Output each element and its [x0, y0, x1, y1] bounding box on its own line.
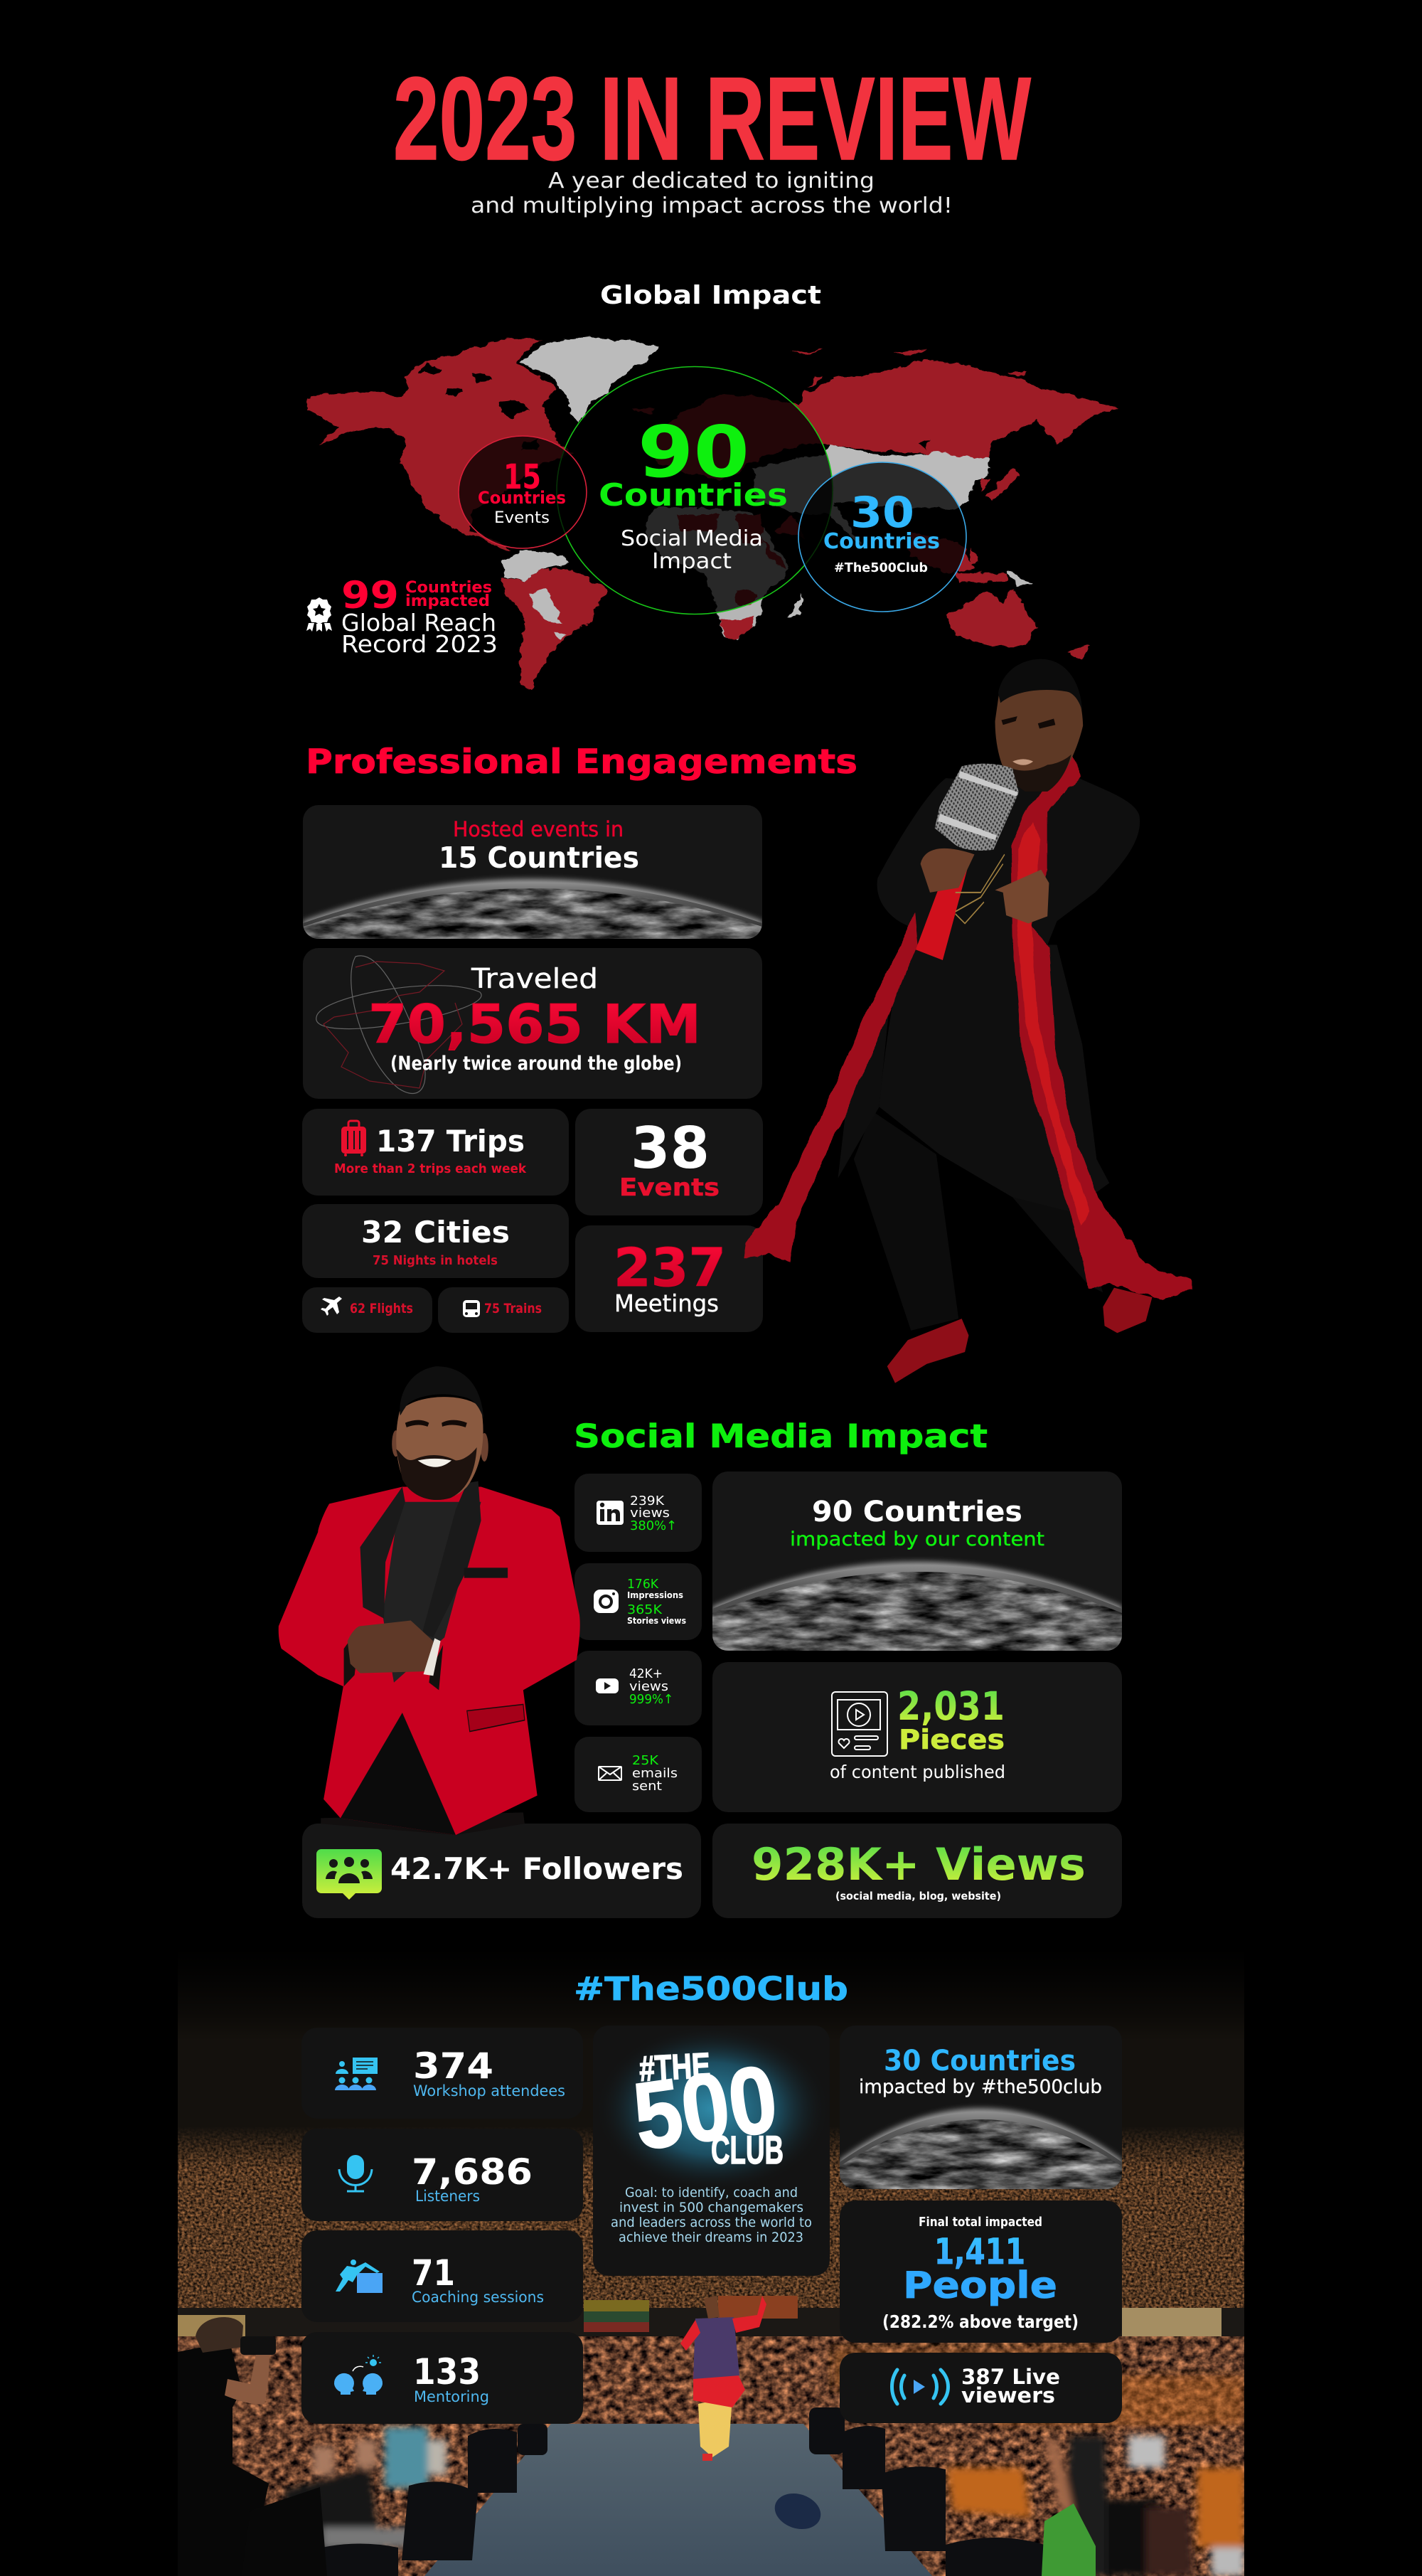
- panel: 32 cities: 32 Cities: [361, 1215, 510, 1250]
- panel: 237 meetings: Meetings: [614, 1289, 719, 1317]
- panel: hosted events in 15 countries: Hosted events in: [453, 817, 624, 841]
- panel: linkedin: 380%↑: [630, 1518, 677, 1533]
- circle: 15 countries events: Countries: [478, 488, 566, 508]
- icon: workshop: [335, 2058, 378, 2090]
- panel: 62 flights: [302, 1287, 432, 1333]
- panel: 75 trains: [438, 1287, 569, 1333]
- earth image: [712, 1562, 1122, 1651]
- heading: the500club: #The500Club: [574, 1970, 848, 2008]
- subtitle: [471, 169, 953, 218]
- icon: microphone: [339, 2155, 372, 2191]
- icon: followers bubble: [316, 1849, 382, 1900]
- panel: 374 workshop attendees: 374: [413, 2045, 493, 2087]
- circle: 15 countries events: [459, 436, 587, 548]
- icon: live stream: [892, 2370, 948, 2404]
- panel: 133 mentoring: [301, 2332, 583, 2424]
- global reach record: impacted: [405, 592, 490, 610]
- global reach record: Global Reach: [341, 609, 496, 637]
- panel: 387 live viewers: viewers: [961, 2383, 1055, 2407]
- earth image: [840, 2108, 1122, 2189]
- global reach record: Record 2023: [341, 630, 498, 658]
- panel: the500club background photo: [178, 1949, 1244, 2576]
- panel: 75 trains: 75 Trains: [484, 1301, 542, 1316]
- panel: email: sent: [632, 1779, 662, 1794]
- title: 2023 IN REVIEW: [393, 53, 1031, 185]
- figure: smiling man in red blazer: [279, 1366, 580, 1835]
- icon: luggage: [341, 1121, 366, 1156]
- panel: 374 workshop attendees: Workshop attendees: [413, 2082, 565, 2099]
- circle: 15 countries events: Events: [494, 509, 550, 527]
- panel: 42.7k followers: 42.7K+ Followers: [390, 1851, 683, 1886]
- circle: 30 countries the500club: 30: [850, 488, 914, 538]
- panel: 374 workshop attendees: [301, 2028, 583, 2119]
- panel: 1,411 people: People: [903, 2264, 1057, 2307]
- icon: youtube: [596, 1678, 619, 1693]
- panel: 2,031 pieces: Pieces: [899, 1724, 1005, 1755]
- upper stands crowd: [178, 2127, 1244, 2319]
- logo: 500: [627, 2045, 784, 2171]
- panel: 137 trips: [302, 1109, 569, 1196]
- global reach record: 99: [341, 574, 399, 617]
- panel: 237 meetings: 237: [614, 1238, 726, 1299]
- icon: envelope: [599, 1767, 621, 1780]
- panel: 137 trips: 137 Trips: [376, 1124, 525, 1159]
- circle: 90 countries social media impact: [557, 367, 833, 614]
- panel: 2,031 pieces: [712, 1662, 1122, 1812]
- panel: 137 trips: More than 2 trips each week: [334, 1161, 527, 1176]
- panel: 32 cities: [302, 1204, 569, 1278]
- panel: 30 countries impacted by the500club: impacted by #the500club: [859, 2076, 1102, 2098]
- panel: instagram: [574, 1563, 702, 1640]
- panel: instagram: Stories views: [627, 1616, 686, 1626]
- panel: linkedin: [574, 1474, 702, 1552]
- global reach record: [306, 574, 498, 658]
- green shirt attendee: [1042, 2503, 1096, 2576]
- goal text: [611, 2185, 812, 2245]
- goal text: Goal: to identify, coach and: [625, 2185, 798, 2200]
- circle: 30 countries the500club: [798, 462, 966, 612]
- circle: 90 countries social media impact: Impact: [652, 549, 732, 574]
- circle: 15 countries events: 15: [503, 457, 541, 497]
- circle: 90 countries social media impact: Social Media: [621, 526, 763, 551]
- panel: email: 25K: [632, 1753, 659, 1768]
- circle: 30 countries the500club: #The500Club: [834, 560, 928, 575]
- panel: 928k views: (social media, blog, website): [835, 1890, 1001, 1902]
- goal text: achieve their dreams in 2023: [619, 2230, 803, 2245]
- panel: youtube: 999%↑: [629, 1692, 673, 1707]
- icon: linkedin: [597, 1501, 624, 1525]
- subtitle: A year dedicated to igniting: [548, 169, 875, 193]
- panel: 42.7k followers: [302, 1824, 701, 1918]
- panel: 1,411 people: (282.2% above target): [882, 2311, 1079, 2332]
- panel: 387 live viewers: [840, 2353, 1122, 2423]
- figure: speaker on stage: [680, 2296, 766, 2461]
- icon: content tablet: [832, 1692, 887, 1756]
- icon: plane: [321, 1297, 342, 1316]
- panel: instagram: 176K: [627, 1577, 659, 1592]
- panel: 90 countries impacted by our content: 90 Countries: [812, 1496, 1022, 1528]
- global reach record: Countries: [405, 579, 492, 597]
- panel: 387 live viewers: 387 Live: [961, 2365, 1060, 2389]
- panel: youtube: 42K+: [629, 1666, 663, 1681]
- panel: 90 countries impacted by our content: [712, 1471, 1122, 1651]
- crowd figures: [284, 2347, 1244, 2576]
- panel: 38 events: Events: [619, 1173, 720, 1202]
- panel: traveled 70,565 km: Traveled: [471, 963, 598, 994]
- panel: 71 coaching sessions: 71: [412, 2252, 455, 2294]
- panel: traveled 70,565 km: 70,565 KM: [368, 993, 701, 1055]
- panel: 7,686 listeners: 7,686: [412, 2151, 533, 2193]
- panel: hosted events in 15 countries: [303, 805, 762, 939]
- ball: [775, 2493, 820, 2529]
- panel: 62 flights: 62 Flights: [350, 1301, 413, 1316]
- panel: 90 countries impacted by our content: impacted by our content: [790, 1528, 1044, 1550]
- circle: 90 countries social media impact: Countries: [599, 477, 788, 513]
- lower crowd: [178, 2336, 1244, 2576]
- panel: linkedin: 239K: [630, 1494, 665, 1508]
- photographer: [178, 2317, 327, 2576]
- panel: 30 countries impacted by the500club: [840, 2026, 1122, 2189]
- world map: [306, 337, 1117, 691]
- panel: linkedin: views: [630, 1506, 670, 1521]
- panel: 71 coaching sessions: [301, 2230, 583, 2322]
- panel: 32 cities: 75 Nights in hotels: [373, 1253, 498, 1268]
- stage: [424, 2424, 932, 2576]
- icon: instagram: [594, 1590, 619, 1613]
- panel: youtube: [574, 1651, 702, 1725]
- panel: 928k views: 928K+ Views: [752, 1838, 1086, 1890]
- panel: 2,031 pieces: 2,031: [897, 1683, 1005, 1729]
- top fade: [178, 1949, 1244, 2011]
- heading: professional engagements: Professional Engagements: [306, 743, 857, 782]
- panel: 38 events: 38: [631, 1115, 710, 1181]
- panel: hosted events in 15 countries: 15 Countries: [439, 841, 639, 875]
- panel: traveled 70,565 km: [303, 948, 762, 1099]
- icon: bus: [463, 1300, 480, 1317]
- stage lights: [301, 2407, 1044, 2576]
- panel: 133 mentoring: 133: [413, 2351, 481, 2393]
- panel: 1,411 people: 1,411: [934, 2231, 1025, 2272]
- panel: instagram: Impressions: [627, 1590, 683, 1600]
- panel: email: [574, 1737, 702, 1812]
- icon: award ribbon: [306, 597, 332, 632]
- icon: globe route sketch: [316, 956, 481, 1094]
- panel: 30 countries impacted by the500club: 30 Countries: [884, 2045, 1076, 2077]
- panel: the 500 club logo and goal: [593, 2025, 830, 2276]
- goal text: invest in 500 changemakers: [619, 2200, 803, 2215]
- panel: youtube: views: [629, 1679, 668, 1694]
- panel: 71 coaching sessions: Coaching sessions: [412, 2289, 544, 2306]
- logo: CLUB: [711, 2127, 784, 2172]
- heading: social media impact: Social Media Impact: [574, 1417, 988, 1455]
- logo: #THE: [638, 2045, 711, 2089]
- panel: 7,686 listeners: Listeners: [415, 2188, 480, 2205]
- panel: 928k views: [712, 1824, 1122, 1918]
- panel: traveled 70,565 km: (Nearly twice around the globe): [390, 1053, 682, 1075]
- panel: 1,411 people: [840, 2200, 1122, 2343]
- earth image: [303, 879, 762, 939]
- circle: 90 countries social media impact: 90: [638, 410, 749, 494]
- figure: speaker with microphone and red scarf: [744, 659, 1192, 1383]
- panel: 237 meetings: [575, 1225, 763, 1332]
- subtitle: and multiplying impact across the world!: [471, 193, 953, 218]
- panel: 38 events: [575, 1109, 763, 1215]
- heading: global impact: Global Impact: [600, 281, 821, 310]
- panel: email: emails: [632, 1766, 678, 1781]
- panel: instagram: 365K: [627, 1602, 663, 1617]
- panel: 1,411 people: Final total impacted: [919, 2215, 1042, 2230]
- icon: mentoring: [334, 2355, 383, 2395]
- panel: 133 mentoring: Mentoring: [414, 2388, 489, 2405]
- panel: 2,031 pieces: of content published: [830, 1762, 1005, 1782]
- panel: 7,686 listeners: [301, 2129, 583, 2221]
- icon: coaching: [336, 2260, 383, 2293]
- circle: 30 countries the500club: Countries: [823, 529, 940, 554]
- goal text: and leaders across the world to: [611, 2215, 812, 2230]
